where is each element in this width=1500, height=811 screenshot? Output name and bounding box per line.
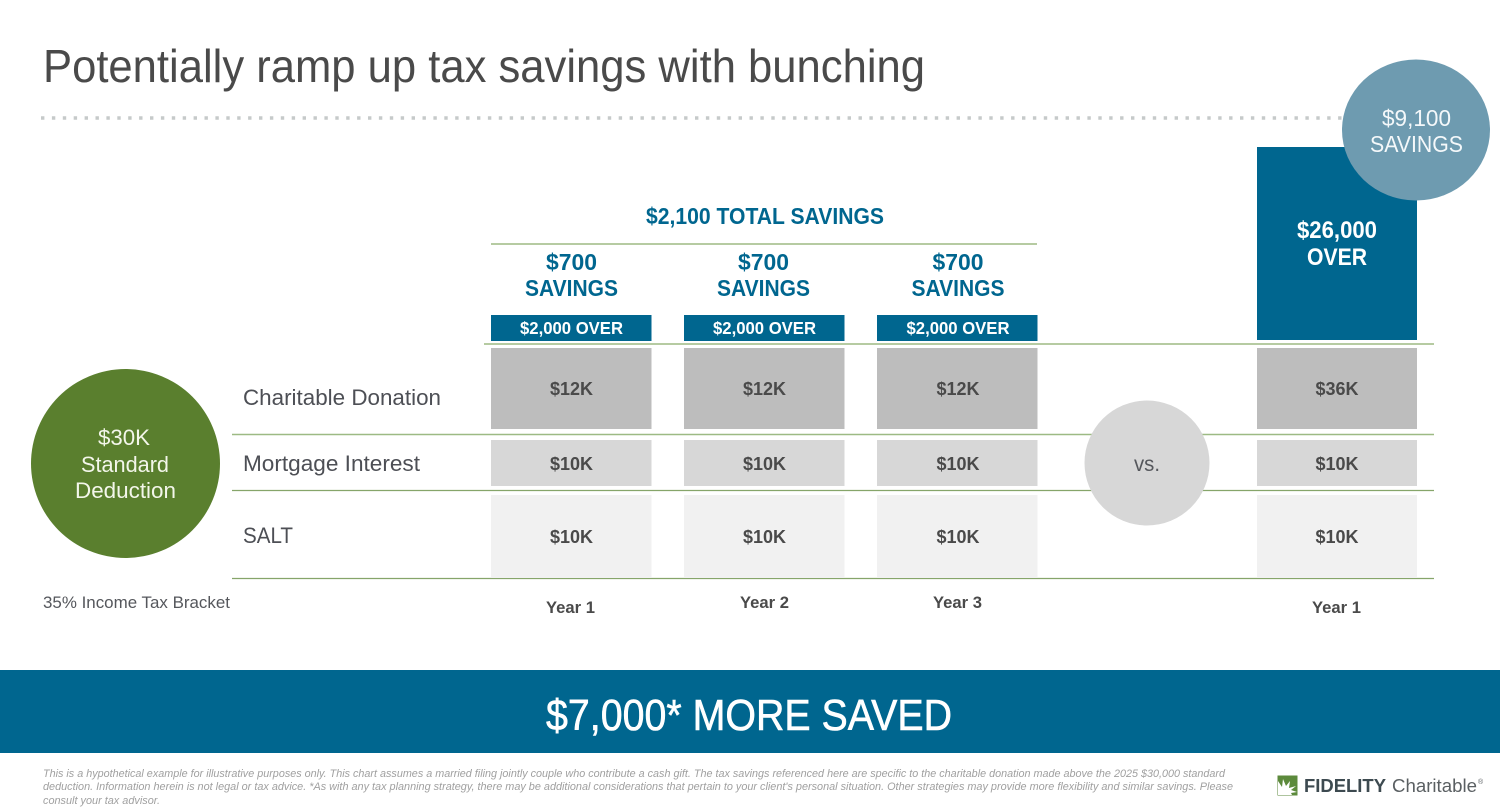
row labels [243, 385, 441, 548]
column: year 1: $10K [550, 454, 593, 474]
logo: Fidelity Charitable: Charitable [1392, 776, 1477, 796]
row labels: Charitable Donation [243, 385, 441, 410]
column: bunched year 1: OVER [1307, 244, 1367, 271]
column: year 1: $2,000 OVER [520, 318, 623, 338]
panel: standard deduction circle [31, 369, 220, 558]
column: bunched year 1: $26,000 [1297, 217, 1377, 244]
footnote: consult your tax advisor. [43, 795, 160, 807]
column: year 1: $700 [546, 249, 597, 275]
column: bunched year 1: $36K [1316, 379, 1359, 399]
panel: standard deduction circle: Deduction [75, 478, 176, 503]
logo: Fidelity Charitable [1278, 776, 1484, 796]
footnote: deduction. Information herein is not legal or tax advice. *As with any tax planning strategy, there may be additional considerations that pertain to your client's personal situation. Other strategies may provide more flexibility and similar savings. Please [43, 781, 1233, 793]
logo: Fidelity Charitable: FIDELITY [1304, 776, 1386, 796]
heading: total savings: $2,100 TOTAL SAVINGS [646, 203, 884, 229]
column: year 3 [877, 249, 1038, 612]
column: year 1: $10K [550, 527, 593, 547]
column: year 2: $10K [743, 527, 786, 547]
panel: standard deduction circle: $30K [98, 425, 150, 450]
logo: Fidelity Charitable: ® [1478, 778, 1484, 786]
column: year 2 [684, 249, 844, 612]
row labels: SALT [243, 523, 293, 548]
column: year 2: SAVINGS [717, 275, 810, 301]
panel: standard deduction circle: Standard [81, 452, 169, 477]
column: bunched year 1 [1257, 147, 1417, 617]
banner: more saved [0, 670, 1500, 753]
column: year 1 [491, 249, 652, 617]
savings circle [1342, 60, 1490, 200]
vs. circle: vs. [1134, 453, 1160, 476]
column: year 3: $10K [936, 527, 980, 547]
column: year 1: Year 1 [546, 598, 595, 617]
column: year 3: $12K [936, 379, 980, 399]
column: year 2: $10K [743, 454, 786, 474]
column: year 3: SAVINGS [912, 275, 1004, 301]
column: year 1: SAVINGS [525, 275, 618, 301]
banner: more saved: $7,000* MORE SAVED [546, 691, 952, 740]
column: bunched year 1: Year 1 [1312, 598, 1361, 617]
column: year 2: $12K [743, 379, 786, 399]
savings circle: SAVINGS [1370, 131, 1463, 157]
row labels: Mortgage Interest [243, 451, 420, 476]
column: year 3: $10K [936, 454, 980, 474]
column: bunched year 1: $10K [1316, 527, 1359, 547]
footnote: This is a hypothetical example for illustrative purposes only. This chart assumes a married filing jointly couple who contribute a cash gift. The tax savings referenced here are specific to the charitable donation made above the 2025 $30,000 standard [43, 768, 1226, 780]
column: bunched year 1: $10K [1316, 454, 1359, 474]
column: year 2: $2,000 OVER [713, 318, 816, 338]
title: Potentially ramp up tax savings with bunching [43, 40, 925, 92]
label: tax bracket: 35% Income Tax Bracket [43, 593, 230, 612]
column: year 3: $700 [932, 249, 984, 275]
vs. circle [1084, 400, 1210, 526]
column: year 3: Year 3 [933, 593, 982, 612]
column: year 1: $12K [550, 379, 593, 399]
savings circle: $9,100 [1382, 105, 1451, 131]
column: year 2: $700 [738, 249, 789, 275]
footnote [43, 768, 1233, 807]
column: year 2: Year 2 [740, 593, 789, 612]
column: year 3: $2,000 OVER [906, 318, 1010, 338]
